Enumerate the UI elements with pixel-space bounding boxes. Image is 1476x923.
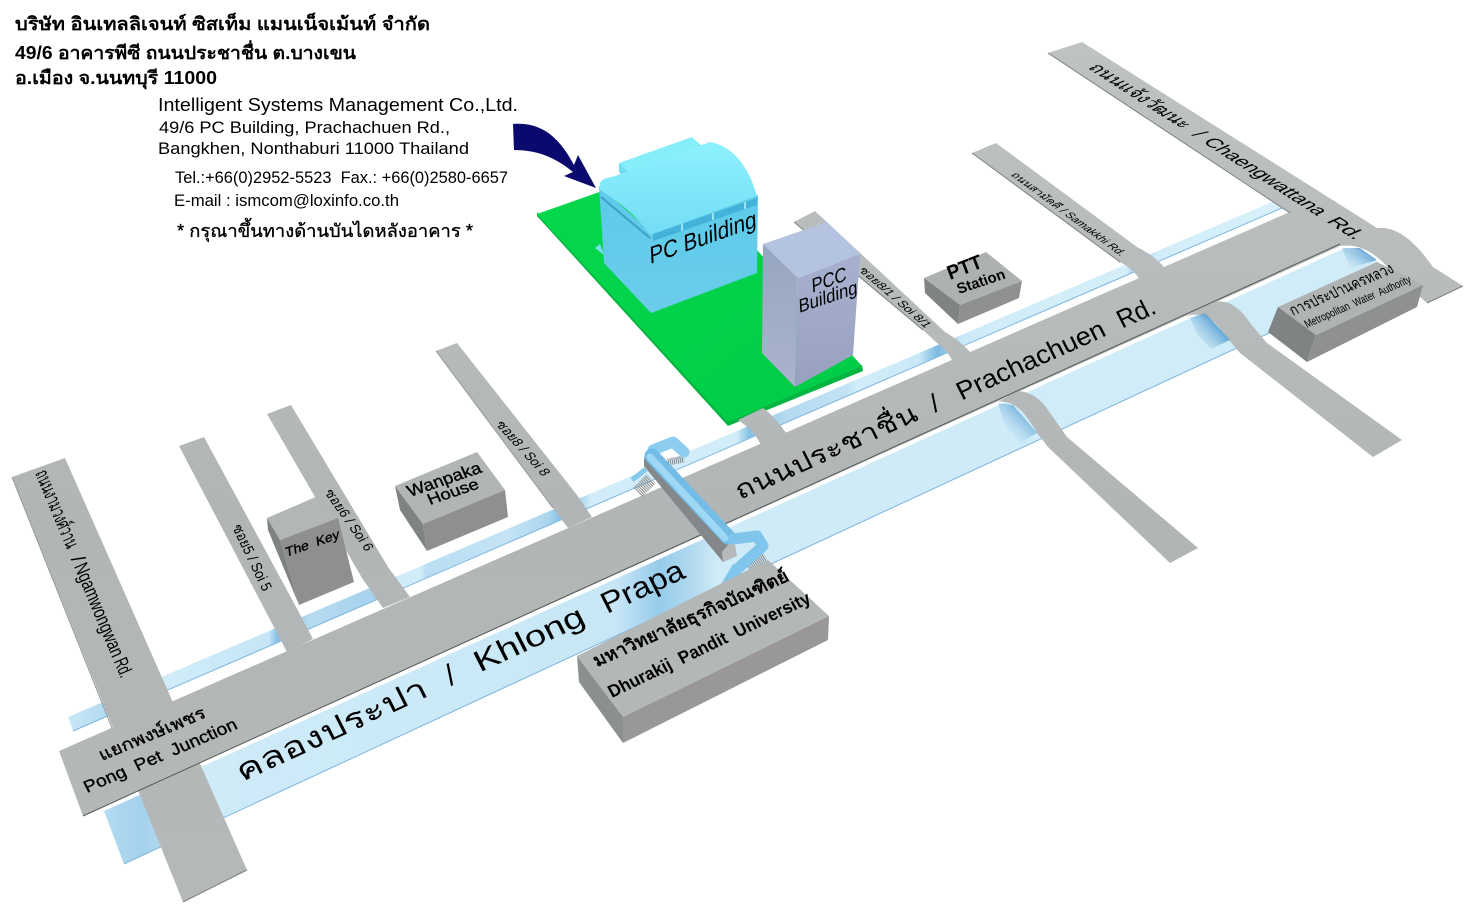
label: Ngamwongwan Rd — [30, 466, 137, 681]
canal: Khlong Prapa water band — [104, 248, 1378, 864]
label: Soi 8/1: ซอย8/1 / Soi 8/1 — [855, 265, 935, 330]
stair annex — [595, 244, 604, 255]
back roof volume — [619, 137, 702, 172]
footbridge: lower ramp — [720, 536, 765, 586]
walls — [599, 186, 651, 313]
company address in English: 49/6 PC Building, Prachachuen Rd., — [159, 118, 450, 137]
label: Soi 5: ซอย5 / Soi 5 — [228, 522, 275, 594]
label: Khlong Prapa: Khlong — [468, 600, 590, 679]
label: Metropolitan Water Authority: การประปานครหลวง — [1286, 261, 1397, 319]
road: Soi 6 — [267, 405, 410, 608]
building: Wanpaka House — [395, 452, 508, 551]
label: Ngamwongwan Rd: Rd. — [109, 655, 136, 681]
arrow pointing to PC Building — [513, 124, 596, 188]
label: PCC Building: PCC — [811, 263, 847, 298]
contact details: E-mail : ismcom@loxinfo.co.th — [174, 192, 399, 210]
label: PCC Building: Building — [798, 277, 858, 318]
label: Chaengwattana Rd: ถนนแจ้งวัฒนะ — [1082, 61, 1198, 131]
road: bridge two over canal — [1187, 301, 1402, 457]
footbridge — [632, 442, 765, 586]
label: Chaengwattana Rd: / — [1187, 128, 1212, 140]
window band — [653, 198, 757, 241]
contact details: Tel.:+66(0)2952-5523 Fax.: +66(0)2580-6657 — [175, 169, 508, 187]
label: The Key: The Key — [285, 526, 341, 560]
label: Metropolitan Water Authority — [1286, 261, 1414, 331]
company address in Thai: อ.เมือง จ.นนทบุรี 11000 — [15, 68, 217, 90]
road: Chaengwattana with hump — [1048, 42, 1463, 303]
label: Khlong Prapa: / — [439, 659, 462, 692]
footbridge: upper stairs — [632, 442, 684, 492]
company address in English — [158, 94, 518, 158]
label: Khlong Prapa: คลองประปา — [230, 672, 433, 788]
label: PTT Station: Station — [954, 266, 1008, 298]
label: Ngamwongwan Rd: / — [66, 552, 89, 567]
label: Chaengwattana Rd — [1082, 61, 1371, 242]
building: Metropolitan Water Authority — [1268, 261, 1423, 362]
label: Prachachuen Rd: / — [925, 390, 945, 418]
label: Prachachuen Rd: ถนนประชาชื่น — [728, 395, 923, 505]
building: The Key — [267, 496, 354, 605]
road: bridge one over canal — [998, 391, 1198, 563]
footbridge: tube — [650, 456, 728, 538]
label: PTT Station: PTT — [944, 251, 985, 285]
label: Prachachuen Rd: Prachachuen — [952, 316, 1110, 406]
label: PC Building: PC Building — [649, 206, 757, 270]
building: Dhurakij Pandit University — [577, 560, 829, 743]
label: Khlong Prapa: Prapa — [595, 554, 690, 620]
label: Prachachuen Rd — [728, 289, 1160, 505]
road: Samakkhi — [972, 143, 1164, 280]
label: PTT Station — [944, 251, 1008, 298]
company address in Thai: บริษัท อินเทลลิเจนท์ ซิสเท็ม แมนเน็จเม้นท์ จำกัด — [15, 12, 430, 34]
building: PCC Building — [762, 222, 860, 387]
company address in Thai: 49/6 อาคารพีซี ถนนประชาชื่น ต.บางเขน — [15, 40, 357, 63]
contact details — [174, 169, 508, 210]
canal strip behind Prachachuen Rd — [68, 202, 1282, 731]
label: Pong Pet Junction: แยกพงษ์เพชร — [95, 704, 209, 765]
road: Ngamwongwan — [12, 458, 247, 902]
label: Chaengwattana Rd: Rd. — [1321, 215, 1371, 242]
building: PTT Station — [924, 251, 1022, 324]
road: link from green plot — [738, 408, 787, 447]
label: Soi 8: ซอย8 / Soi 8 — [492, 419, 555, 478]
label: Pong Pet Junction: Pong Pet Junction — [80, 715, 240, 797]
company address in English: Intelligent Systems Management Co.,Ltd. — [158, 94, 518, 115]
vaulted roof — [600, 142, 757, 235]
label: Ngamwongwan Rd: Ngamwongwan — [69, 560, 128, 661]
note about rear stairs: * กรุณาขึ้นทางด้านบันไดหลังอาคาร * — [177, 218, 473, 242]
road: Soi 8 — [436, 343, 592, 528]
label: Wanpaka House: Wanpaka — [404, 458, 485, 501]
bridge shadows on canal — [998, 248, 1377, 443]
road: Prachachuen main road — [59, 211, 1340, 816]
label: Ngamwongwan Rd: ถนนงามวงศ์วาน — [30, 466, 83, 552]
label: Chaengwattana Rd: Chaengwattana — [1197, 135, 1334, 218]
road: Soi 8/1 — [794, 211, 971, 362]
green building plot — [537, 164, 863, 426]
label: Prachachuen Rd: Rd. — [1112, 293, 1160, 334]
label: Khlong Prapa — [230, 554, 690, 788]
company address in Thai — [15, 12, 430, 90]
label: Metropolitan Water Authority: Metropolitan Water Authority — [1302, 274, 1414, 331]
road: Soi 5 — [179, 437, 313, 652]
company address in English: Bangkhen, Nonthaburi 11000 Thailand — [158, 139, 469, 158]
label: Soi 6: ซอย6 / Soi 6 — [321, 487, 378, 553]
label: Wanpaka House: House — [425, 476, 482, 509]
footbridge: deck — [644, 455, 736, 562]
label: university name: Dhurakij Pandit University — [604, 588, 814, 701]
building: PC Building — [595, 137, 758, 313]
label: university name: มหาวิทยาลัยธุรกิจบัณฑิตย์ — [589, 565, 793, 671]
label: Samakkhi Rd: ถนนสามัคคี / Samakkhi Rd. — [1007, 171, 1129, 258]
